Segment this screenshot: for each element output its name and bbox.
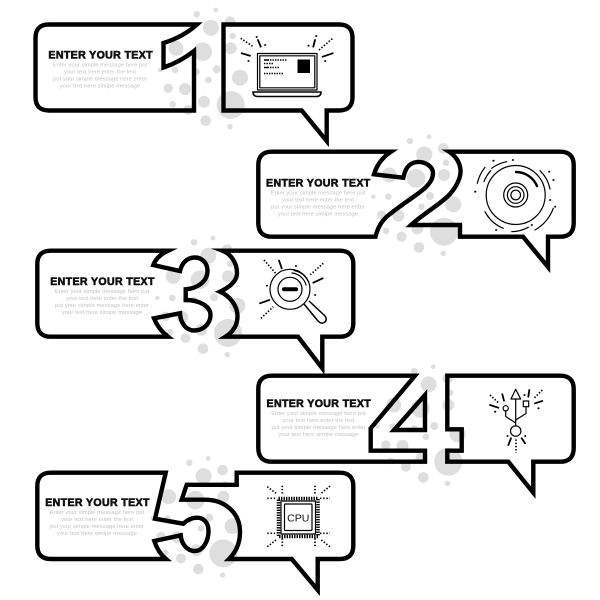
icon: usb xyxy=(490,389,542,453)
text block 2: put your simple message here enter xyxy=(271,204,365,210)
number 5 right bubble outline with tail xyxy=(182,473,353,590)
icon: cpu xyxy=(267,486,330,547)
background dots: panel 5 xyxy=(150,456,241,578)
text block 5: put your simple message here enter xyxy=(50,524,144,530)
text block 3: your text here simipe message xyxy=(62,310,143,316)
panel 3 xyxy=(37,251,353,368)
heading 4: ENTER YOUR TEXT xyxy=(267,398,371,410)
text block 2: your text here simipe message xyxy=(278,212,359,218)
icon: disc xyxy=(475,160,555,232)
heading 2: ENTER YOUR TEXT xyxy=(266,178,371,190)
text block 3: Enter your simple message here put xyxy=(55,289,150,295)
text block 4: your text here enter the text xyxy=(282,418,355,424)
number 2 right bubble outline with tail xyxy=(411,152,574,267)
number 5 left bubble outline xyxy=(37,473,208,559)
text block 1: put your simple message here enter xyxy=(53,76,147,82)
text block 1 xyxy=(53,62,148,90)
background dots: panel 2 xyxy=(371,134,461,256)
icon: cpu: CPU xyxy=(287,512,309,524)
number 2 left bubble outline xyxy=(258,152,433,237)
heading 1: ENTER YOUR TEXT xyxy=(48,50,153,62)
text block 1: your text here enter the text xyxy=(64,70,136,76)
text block 1: your text here simipe message xyxy=(60,84,141,90)
background dots: panel 4 xyxy=(375,364,466,486)
text block 2: your text here enter the text xyxy=(282,198,354,204)
text block 5: your text here simipe message xyxy=(57,531,138,537)
icon: laptop xyxy=(241,36,333,96)
text block 3: your text here enter the text xyxy=(66,296,138,302)
text block 2: Enter your simple message here put xyxy=(271,190,366,196)
text block 4: Enter your simple message here put xyxy=(271,411,366,417)
text block 2 xyxy=(271,190,366,218)
text block 5: Enter your simple message here put xyxy=(50,510,145,516)
panel 1 xyxy=(36,24,352,141)
panel 5 xyxy=(37,473,353,590)
number 4 counter triangle xyxy=(394,395,425,430)
heading 3: ENTER YOUR TEXT xyxy=(50,276,155,288)
panel 4 xyxy=(258,376,574,493)
number 4 right bubble outline with tail xyxy=(447,376,574,493)
number 4 left bubble outline xyxy=(258,376,425,462)
number 1 right bubble outline with tail xyxy=(224,24,352,141)
number 1 left bubble outline xyxy=(36,24,197,110)
background dots: panel 3 xyxy=(155,236,245,357)
text block 4 xyxy=(271,411,366,438)
text block 3: put your simple message here enter xyxy=(55,303,149,309)
icon: magnifier xyxy=(260,260,326,323)
number 3 right bubble outline with tail xyxy=(220,251,353,368)
number 3 left bubble outline xyxy=(37,251,210,337)
text block 1: Enter your simple message here put xyxy=(53,62,148,68)
background dots: panel 1 xyxy=(158,8,248,129)
text block 4: put your simple message here enter xyxy=(272,425,366,431)
panel 2 xyxy=(258,152,574,267)
heading 5: ENTER YOUR TEXT xyxy=(45,497,150,509)
text block 5 xyxy=(50,510,145,537)
text block 3 xyxy=(55,289,150,316)
text block 4: your text here simipe message xyxy=(278,432,359,438)
text block 5: your text here enter the text xyxy=(61,517,133,523)
